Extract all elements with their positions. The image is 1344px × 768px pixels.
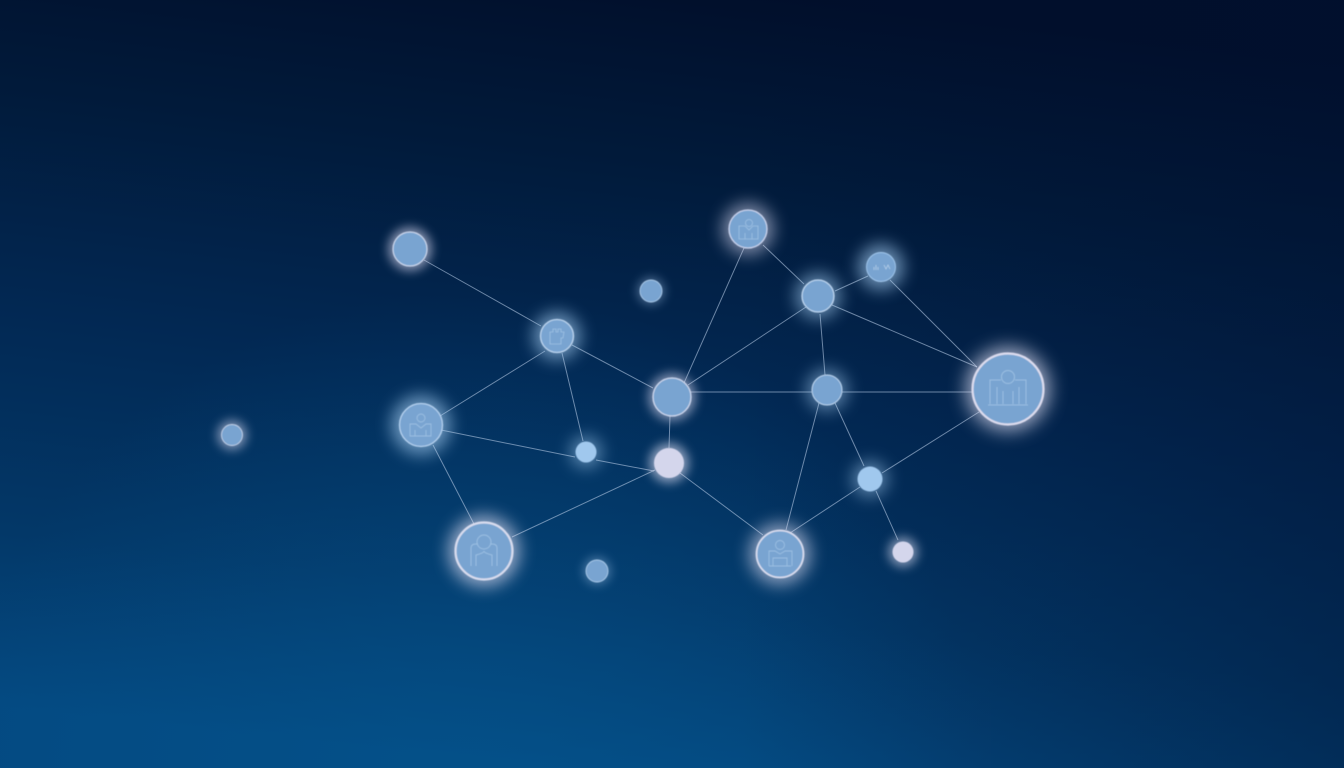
node: top centre with icon	[722, 203, 774, 255]
node: large right with icon	[966, 347, 1050, 431]
node: upper right with icon	[858, 244, 904, 290]
node: upper right hub	[795, 273, 841, 319]
icon: person with bar chart	[988, 370, 1028, 405]
node: central pale	[649, 443, 689, 483]
node: small blue	[570, 436, 602, 468]
icon: person at desk	[769, 540, 792, 566]
node: left hub with icon	[391, 395, 451, 455]
node: lower right blue	[852, 461, 888, 497]
icon: person at desk	[410, 414, 431, 436]
icon: document	[550, 329, 564, 344]
node: top left	[388, 227, 432, 271]
node: middle right hub	[806, 369, 848, 411]
icon: tiny marks	[874, 265, 890, 270]
node: far left	[217, 420, 247, 450]
connection lines	[424, 245, 979, 540]
node: central blue hub	[648, 373, 696, 421]
node: upper left hub with icon	[533, 312, 581, 360]
icon: person with chart	[739, 220, 758, 239]
node: small top centre	[637, 277, 665, 305]
node: bottom left large with icon	[448, 515, 520, 587]
node: small bottom centre	[583, 557, 611, 585]
node: bottom centre with icon	[749, 523, 811, 585]
icon: person	[471, 535, 497, 566]
node: lower right pale	[888, 537, 918, 567]
